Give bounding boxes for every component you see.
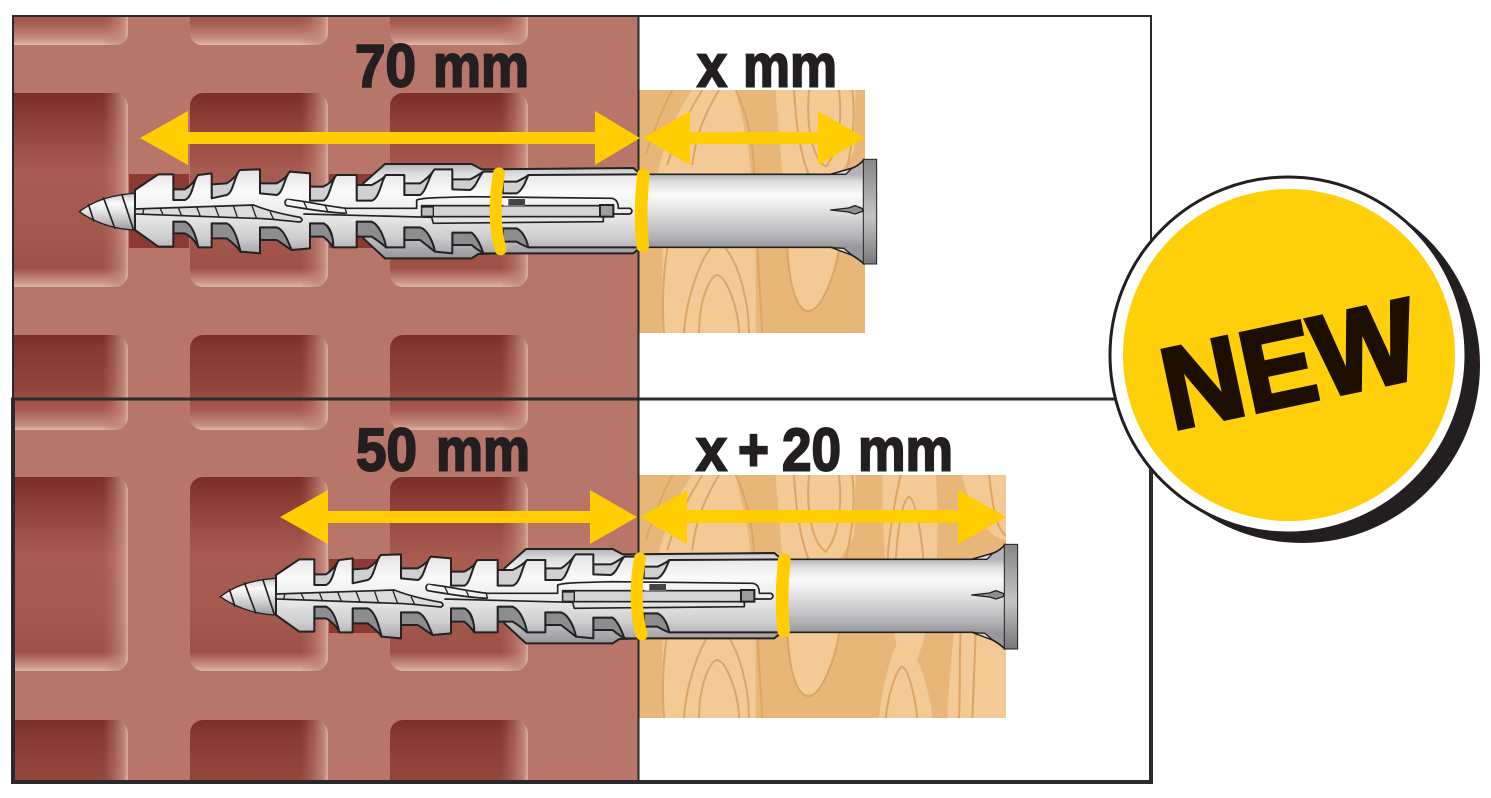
panel: wood top: [640, 90, 865, 333]
badge: NEW: [1110, 177, 1480, 543]
arrow: 70 mm: [140, 111, 640, 165]
label: 50 mm: [356, 416, 530, 484]
label: x mm: mm: [743, 32, 837, 100]
label: 70 mm: [355, 32, 529, 100]
label: 70 mm: 70: [355, 32, 416, 100]
label: x + 20 mm: x: [696, 416, 727, 484]
badge text: NEW: [1150, 274, 1430, 454]
label: 50 mm: mm: [436, 416, 530, 484]
label: x mm: [697, 32, 837, 100]
label: x + 20 mm: [696, 416, 953, 484]
arrow: 50 mm: [280, 490, 637, 544]
anchor: top plug and screw: [79, 159, 877, 264]
anchor: bottom plug and screw: [220, 544, 1018, 649]
label: x mm: x: [697, 32, 727, 100]
brick holes: [0, 0, 528, 795]
label: 70 mm: mm: [433, 32, 529, 100]
label: 50 mm: 50: [356, 416, 417, 484]
drilled hole: bottom: [329, 559, 378, 633]
panel frames: [11, 16, 1151, 782]
label: x + 20 mm: +: [738, 416, 769, 484]
label: x + 20 mm: 20: [782, 416, 841, 484]
arrow: x mm: [643, 111, 865, 165]
drilled hole: top: [129, 174, 389, 248]
arrow: x + 20 mm: [640, 490, 1006, 544]
label: x + 20 mm: mm: [858, 416, 953, 484]
panel: brick wall: [0, 0, 638, 795]
panel: wood bottom: [639, 475, 1007, 718]
